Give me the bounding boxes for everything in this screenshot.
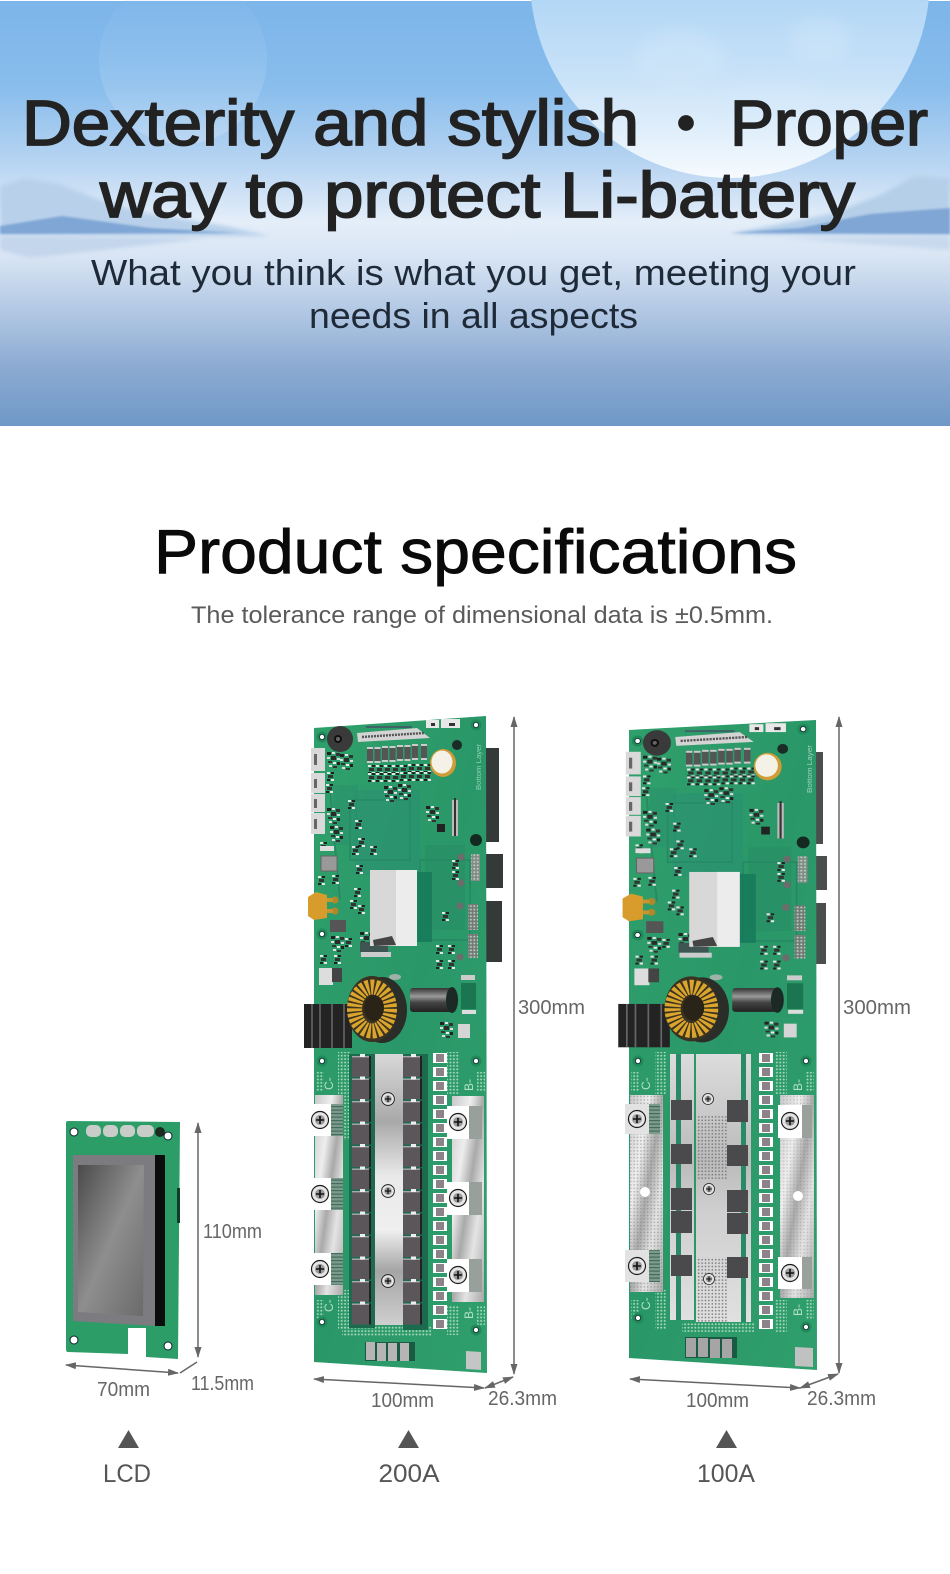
central plate xyxy=(375,1054,403,1325)
board: 100A: Bottom Layer xyxy=(805,744,814,793)
shunt chips xyxy=(685,1337,737,1358)
moon xyxy=(530,0,930,178)
busbars xyxy=(630,1095,663,1292)
capacitor column xyxy=(433,1053,447,1329)
mosfets xyxy=(671,1100,748,1278)
hero title: Proper xyxy=(730,87,928,159)
rear black blocks xyxy=(486,748,503,962)
LCD dimension labels xyxy=(97,1221,262,1401)
capacitor column xyxy=(759,1053,773,1329)
side strips xyxy=(670,1054,694,1320)
hero title xyxy=(22,87,928,231)
shunt chips xyxy=(365,1342,415,1361)
heading: product specifications: Product specifications xyxy=(154,518,797,587)
central plate xyxy=(696,1054,727,1322)
moon texture xyxy=(635,18,850,120)
board: 100A xyxy=(618,720,827,1370)
caption: LCD xyxy=(103,1430,151,1488)
terminals xyxy=(307,1104,482,1292)
rear blocks xyxy=(815,752,827,964)
200A dimension labels: 26.3mm xyxy=(488,1388,557,1410)
LCD buttons xyxy=(86,1125,154,1137)
200A dimensions xyxy=(314,717,514,1388)
polarity marks: C- xyxy=(639,1297,653,1310)
tolerance note: The tolerance range of dimensional data is ±0.5mm. xyxy=(191,602,773,629)
polarity marks: C- xyxy=(322,1077,336,1090)
polarity marks: B- xyxy=(791,1304,805,1316)
hero subtitle: What you think is what you get, meeting your xyxy=(91,252,856,293)
200A dimension labels: 300mm xyxy=(518,997,585,1019)
pad dots xyxy=(655,1052,667,1094)
100A dimension labels: 26.3mm xyxy=(807,1388,876,1410)
terminals xyxy=(625,1104,812,1289)
200A dimension labels xyxy=(371,997,585,1412)
hero banner xyxy=(0,0,950,426)
LCD dimension labels: 110mm xyxy=(203,1221,262,1243)
top half parts xyxy=(618,723,810,1047)
200A dimension labels: 100mm xyxy=(371,1390,434,1412)
100A dimension labels: 300mm xyxy=(843,997,911,1019)
small planet xyxy=(99,0,267,144)
polarity marks xyxy=(639,1077,805,1316)
100A dimension labels: 100mm xyxy=(686,1390,749,1412)
pcb xyxy=(314,716,487,1373)
hero title: way to protect Li-battery xyxy=(99,159,855,231)
polarity marks: C- xyxy=(639,1077,653,1090)
pad dots xyxy=(338,1052,350,1140)
LCD screen xyxy=(155,1155,165,1326)
polarity marks xyxy=(322,1077,476,1319)
pcb xyxy=(629,720,817,1370)
mosfet columns xyxy=(349,1054,428,1330)
LCD dimensions xyxy=(66,1123,198,1373)
busbars xyxy=(315,1095,343,1295)
board: 200A xyxy=(304,716,503,1373)
board: LCD xyxy=(66,1121,180,1359)
LCD pcb xyxy=(66,1121,180,1359)
polarity marks: C- xyxy=(322,1299,336,1312)
mountains xyxy=(0,176,950,258)
top half parts xyxy=(304,719,482,1048)
caption: 100A: 100A xyxy=(697,1460,755,1488)
caption: LCD: LCD xyxy=(103,1460,151,1488)
100A dimension labels xyxy=(686,997,911,1412)
board: 200A: Bottom Layer xyxy=(476,743,483,790)
hero subtitle: needs in all aspects xyxy=(309,295,638,336)
LCD dimension labels: 11.5mm xyxy=(191,1373,254,1395)
caption: 100A xyxy=(697,1430,755,1488)
100A dimensions xyxy=(630,717,839,1388)
polarity marks: B- xyxy=(462,1307,476,1319)
caption: 200A: 200A xyxy=(378,1460,440,1488)
LCD dimension labels: 70mm xyxy=(97,1379,150,1401)
hero subtitle xyxy=(91,252,856,336)
caption: 200A xyxy=(378,1430,440,1488)
polarity marks: B- xyxy=(791,1079,805,1091)
polarity marks: B- xyxy=(462,1079,476,1091)
hero title: Dexterity and stylish xyxy=(22,87,639,159)
